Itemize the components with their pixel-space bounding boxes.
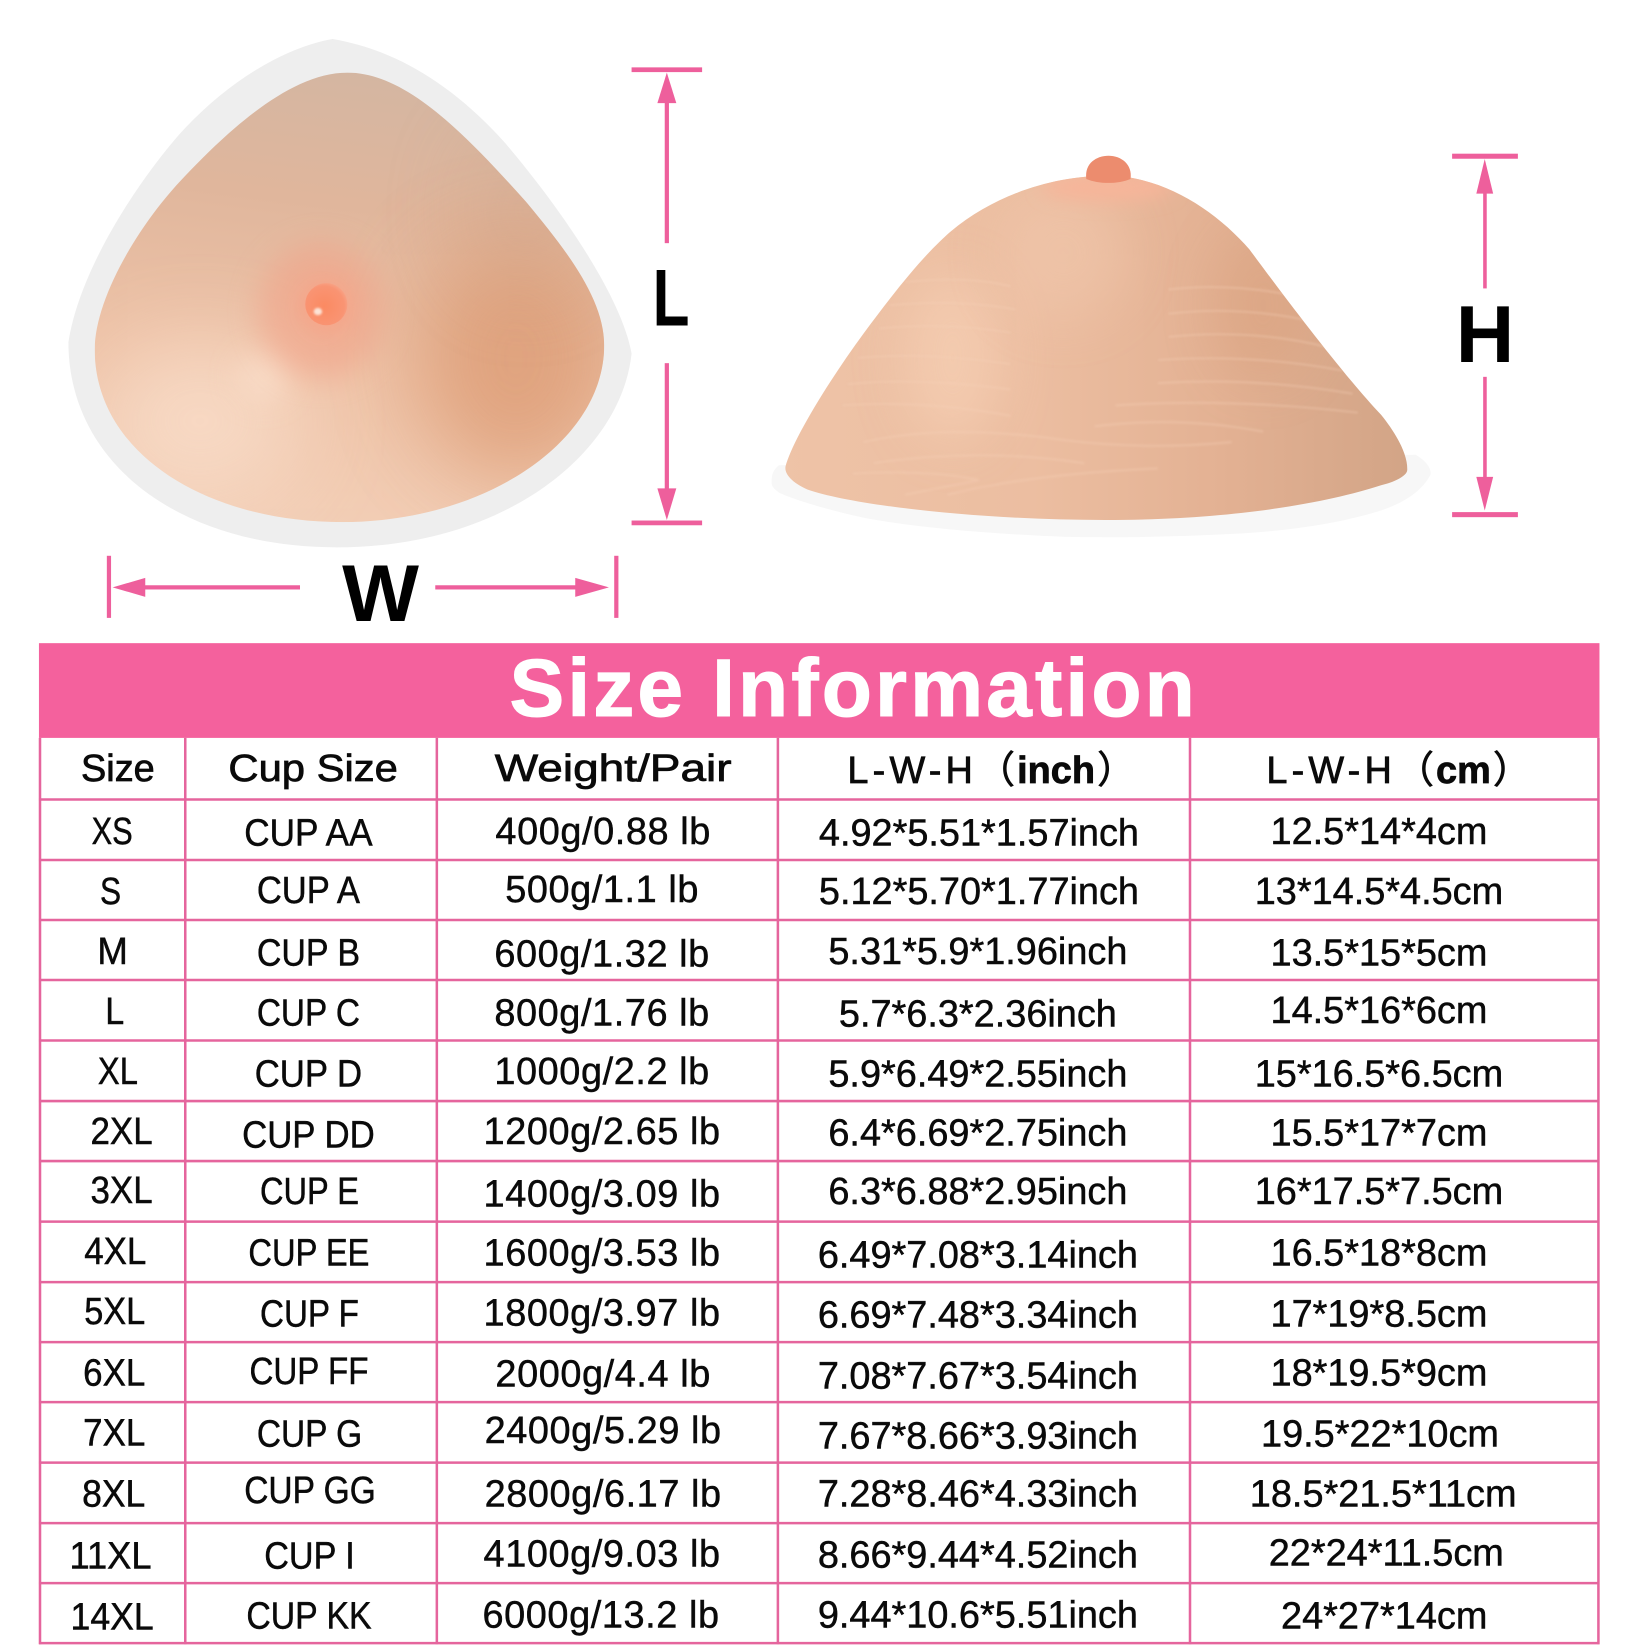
table row: XL: CUP D — [255, 1053, 362, 1095]
table row: 8XL: 18.5*21.5*11cm — [1250, 1473, 1517, 1515]
table row: L: 5.7*6.3*2.36inch — [839, 993, 1117, 1035]
table row: 3XL: 3XL — [91, 1170, 153, 1212]
table row: 6XL — [83, 1351, 1487, 1397]
table row: 14XL: 9.44*10.6*5.51inch — [818, 1594, 1138, 1636]
dimension L: arrow and label — [632, 67, 702, 525]
table row: 14XL: 14XL — [71, 1596, 154, 1638]
table row: S: S — [100, 871, 121, 913]
table row: M: CUP B — [257, 932, 360, 974]
table row: M — [97, 931, 1487, 975]
table row: XS: 12.5*14*4cm — [1271, 811, 1487, 853]
table row: XL: 15*16.5*6.5cm — [1255, 1053, 1503, 1095]
table row: 4XL: 1600g/3.53 lb — [484, 1232, 721, 1274]
silicone body — [779, 168, 1411, 526]
table row: XS — [92, 811, 1487, 854]
product photo: breast form front view — [68, 39, 632, 547]
table grid — [39, 738, 1599, 1644]
table row: S: 500g/1.1 lb — [505, 869, 699, 911]
table body — [69, 811, 1517, 1638]
table row: XL: XL — [98, 1051, 138, 1093]
table row: 2XL: 15.5*17*7cm — [1271, 1112, 1487, 1154]
table row: 11XL — [69, 1532, 1504, 1577]
table row: XS: 4.92*5.51*1.57inch — [819, 812, 1139, 854]
table row: 11XL: 4100g/9.03 lb — [484, 1533, 721, 1575]
table row: 14XL: CUP KK — [246, 1595, 372, 1637]
table row: XL: 5.9*6.49*2.55inch — [828, 1053, 1127, 1095]
nipple — [1086, 156, 1131, 183]
table row: XL: 1000g/2.2 lb — [494, 1051, 710, 1093]
table row: XS: CUP AA — [244, 812, 373, 854]
table row: 6XL: 7.08*7.67*3.54inch — [818, 1355, 1138, 1397]
table row: 4XL: 4XL — [84, 1231, 146, 1273]
table row: 3XL: 1400g/3.09 lb — [484, 1173, 721, 1215]
table row: 11XL: CUP I — [264, 1535, 355, 1577]
table header row — [81, 739, 1531, 794]
table row: 14XL — [71, 1594, 1487, 1638]
table row: 2XL: CUP DD — [242, 1114, 375, 1156]
table row: L: 14.5*16*6cm — [1271, 990, 1487, 1032]
table row: S: 13*14.5*4.5cm — [1255, 871, 1503, 913]
table row: 5XL: 1800g/3.97 lb — [484, 1292, 721, 1334]
table row: 8XL — [82, 1470, 1517, 1515]
table header row: Weight/Pair — [495, 748, 732, 790]
title banner: Size Information: Size Information — [509, 643, 1195, 734]
table header row: Size — [81, 748, 155, 790]
table row: 3XL: 16*17.5*7.5cm — [1255, 1171, 1503, 1213]
table row: 14XL: 6000g/13.2 lb — [483, 1594, 720, 1636]
table row: M: 5.31*5.9*1.96inch — [828, 931, 1127, 973]
table header row: Cup Size — [228, 748, 398, 790]
table row: S: CUP A — [257, 870, 361, 912]
table row: 7XL: 7XL — [83, 1412, 145, 1454]
table row: 4XL: 6.49*7.08*3.14inch — [818, 1234, 1138, 1276]
table row: XS: 400g/0.88 lb — [495, 811, 711, 853]
table row: 11XL: 22*24*11.5cm — [1269, 1532, 1504, 1574]
table row: 7XL: 2400g/5.29 lb — [485, 1410, 722, 1452]
table row: 7XL: CUP G — [257, 1413, 362, 1455]
table row: 5XL — [84, 1291, 1487, 1336]
table row: 2XL — [91, 1111, 1487, 1156]
table row: 6XL: 18*19.5*9cm — [1271, 1352, 1487, 1394]
dimension H: arrow and label: H — [1456, 290, 1514, 380]
table row: L: 800g/1.76 lb — [494, 992, 710, 1034]
table row: 3XL: 6.3*6.88*2.95inch — [828, 1171, 1127, 1213]
table row: 14XL: 24*27*14cm — [1281, 1595, 1487, 1637]
table row: XS: XS — [92, 811, 133, 853]
table row: 6XL: 2000g/4.4 lb — [495, 1353, 711, 1395]
table row: 7XL: 7.67*8.66*3.93inch — [818, 1415, 1138, 1457]
table row: S: 5.12*5.70*1.77inch — [819, 871, 1139, 913]
table row: 8XL: 8XL — [82, 1473, 145, 1515]
dimension L: arrow and label: L — [653, 253, 689, 343]
silicone body — [84, 63, 621, 537]
table row: 3XL — [91, 1170, 1503, 1215]
dimension W: arrow and label: W — [342, 549, 419, 639]
table row: 2XL: 6.4*6.69*2.75inch — [828, 1112, 1127, 1154]
nipple — [299, 278, 354, 333]
table row: 8XL: 7.28*8.46*4.33inch — [818, 1473, 1138, 1515]
title banner: Size Information — [39, 643, 1599, 738]
table row: 7XL — [83, 1410, 1499, 1457]
table header row: L-W-H（cm） — [1266, 739, 1531, 794]
table row: 3XL: CUP E — [260, 1171, 359, 1213]
product photo: breast form side view — [772, 156, 1431, 537]
table row: M: 13.5*15*5cm — [1271, 932, 1487, 974]
table row: M: 600g/1.32 lb — [494, 933, 710, 975]
table row: 5XL: 17*19*8.5cm — [1271, 1293, 1487, 1335]
table row: L: CUP C — [257, 992, 360, 1034]
table row: 7XL: 19.5*22*10cm — [1261, 1413, 1499, 1455]
table row: 2XL: 2XL — [91, 1111, 153, 1153]
table row: 5XL: CUP F — [260, 1293, 359, 1335]
table row: 5XL: 6.69*7.48*3.34inch — [818, 1294, 1138, 1336]
table row: 8XL: 2800g/6.17 lb — [485, 1473, 722, 1515]
table row: L: L — [105, 991, 124, 1033]
table row: M: M — [97, 931, 128, 973]
table row: 5XL: 5XL — [84, 1291, 145, 1333]
table row: 4XL: 16.5*18*8cm — [1271, 1232, 1487, 1274]
table row: 6XL: 6XL — [83, 1352, 145, 1394]
table row: XL — [98, 1051, 1503, 1095]
dimension H: arrow and label — [1452, 154, 1518, 517]
table row: S — [100, 869, 1503, 913]
table row: 4XL — [84, 1231, 1487, 1276]
dimension W: arrow and label — [107, 549, 618, 639]
table row: 2XL: 1200g/2.65 lb — [484, 1111, 721, 1153]
table header row: L-W-H（inch） — [847, 739, 1135, 794]
table row: 4XL: CUP EE — [248, 1232, 369, 1274]
table row: 6XL: CUP FF — [249, 1351, 368, 1393]
table row: 11XL: 11XL — [69, 1535, 152, 1577]
table row: 8XL: CUP GG — [244, 1470, 376, 1512]
table row: 11XL: 8.66*9.44*4.52inch — [818, 1534, 1138, 1576]
table row: L — [105, 990, 1487, 1035]
